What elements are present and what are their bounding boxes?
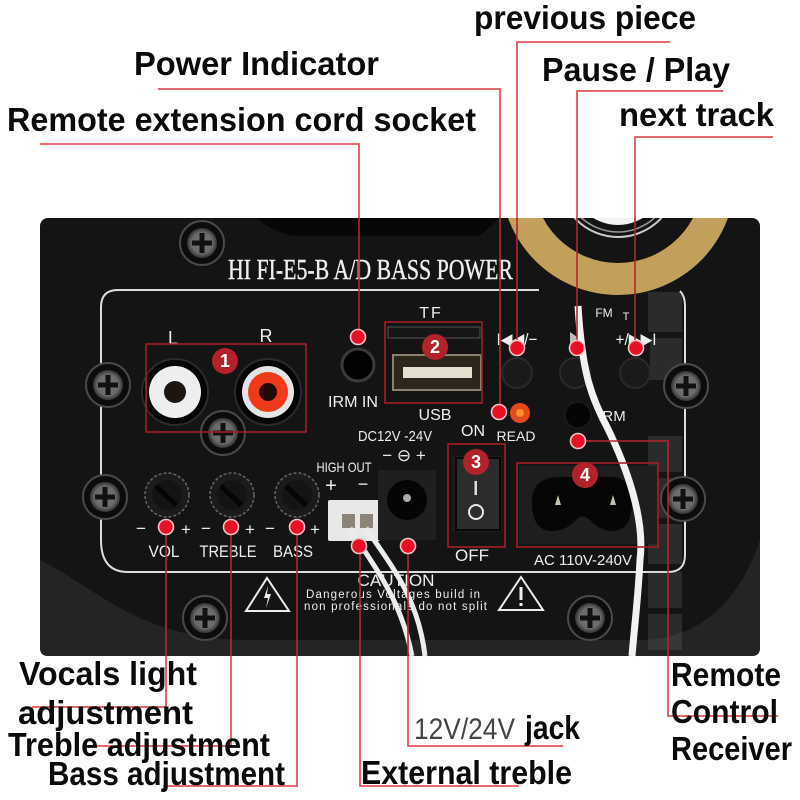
label: bass adjustment: Bass adjustment [48,755,285,792]
label: remote control receiver: Control [671,693,778,730]
number badge 2: 2 [430,337,440,357]
caution text: non professionals do not split [304,601,488,613]
IR receiver: IRM [598,408,626,425]
volume, treble and bass knobs: + [310,520,320,539]
caution text [304,571,488,613]
label: external treble: External treble [361,754,572,791]
number badge 1: 1 [220,351,230,371]
warning triangles [246,577,543,611]
DC jack: DC12V -24V [358,428,432,445]
IR receiver [565,402,626,428]
label: pause and play: Pause / Play [542,51,731,88]
label: 12V/24V jack [414,709,581,746]
high out connector [316,459,380,541]
number badge 3: 3 [471,452,481,472]
RCA inputs [142,326,301,425]
transport buttons: FM [595,306,613,320]
number badge 1 [212,348,238,374]
white panel frame [101,290,685,572]
power switch: OFF [455,546,489,565]
label: remote control receiver [671,656,792,767]
DC jack [358,428,436,540]
label: power indicator: Power Indicator [134,45,379,82]
watermark column [648,292,682,650]
caution text: CAUTION [358,571,434,590]
volume, treble and bass knobs: + [181,520,191,539]
connector dots [158,330,644,554]
read LED: READ [497,428,535,444]
volume, treble and bass knobs: + [245,520,255,539]
screws [83,221,708,640]
volume, treble and bass knobs: − [265,519,275,538]
read LED [497,403,535,444]
IRM IN socket: IRM IN [328,394,378,411]
high out connector: + [325,475,337,497]
DC jack: − ⊖ + [382,446,426,465]
number badge 2 [422,334,448,360]
RCA inputs: R [260,326,272,346]
number badge 4: 4 [580,465,590,485]
USB and TF slots: TF [419,305,443,322]
volume, treble and bass knobs: BASS [273,542,313,561]
caution text: Dangerous Voltages build in [306,589,480,601]
power switch: ON [461,423,485,440]
label: treble adjustment: Treble adjustment [8,726,270,763]
transport buttons [496,306,656,388]
board title: HI FI-E5-B A/D BASS POWER [228,254,513,286]
AC socket: AC 110V-240V [534,552,632,569]
label: 12V/24V jack: jack [524,709,581,746]
label: vocals light adjustment [18,655,197,731]
IRM IN socket [328,349,378,411]
label: vocals light adjustment: adjustment [18,694,193,731]
label: previous piece: previous piece [474,0,696,36]
label: remote extension cord socket: Remote extension cord socket [7,101,476,138]
label: 12V/24V jack: 12V/24V [414,713,515,746]
label: remote control receiver: Remote [671,656,781,693]
component boxes [146,322,658,547]
label: next track: next track [619,96,775,133]
AC socket [519,466,657,569]
USB and TF slots [388,305,481,424]
audio wires [350,306,641,656]
transport buttons: T [623,311,630,323]
RCA inputs: L [168,328,178,348]
volume, treble and bass knobs: − [136,519,146,538]
high out connector: HIGH OUT [316,459,372,475]
volume, treble and bass knobs: TREBLE [200,542,256,561]
USB and TF slots: USB [419,407,451,424]
high out connector: − [358,474,368,494]
power switch [452,423,502,565]
speaker ring [0,0,800,295]
number badge 4 [572,462,598,488]
volume, treble and bass knobs [136,473,320,561]
volume, treble and bass knobs: − [201,519,211,538]
number badge 3 [463,449,489,475]
transport buttons: +/▶▶I [616,330,656,349]
label: vocals light adjustment: Vocals light [19,655,197,692]
volume, treble and bass knobs: VOL [148,542,180,561]
transport buttons: I◀◀/− [496,330,538,349]
